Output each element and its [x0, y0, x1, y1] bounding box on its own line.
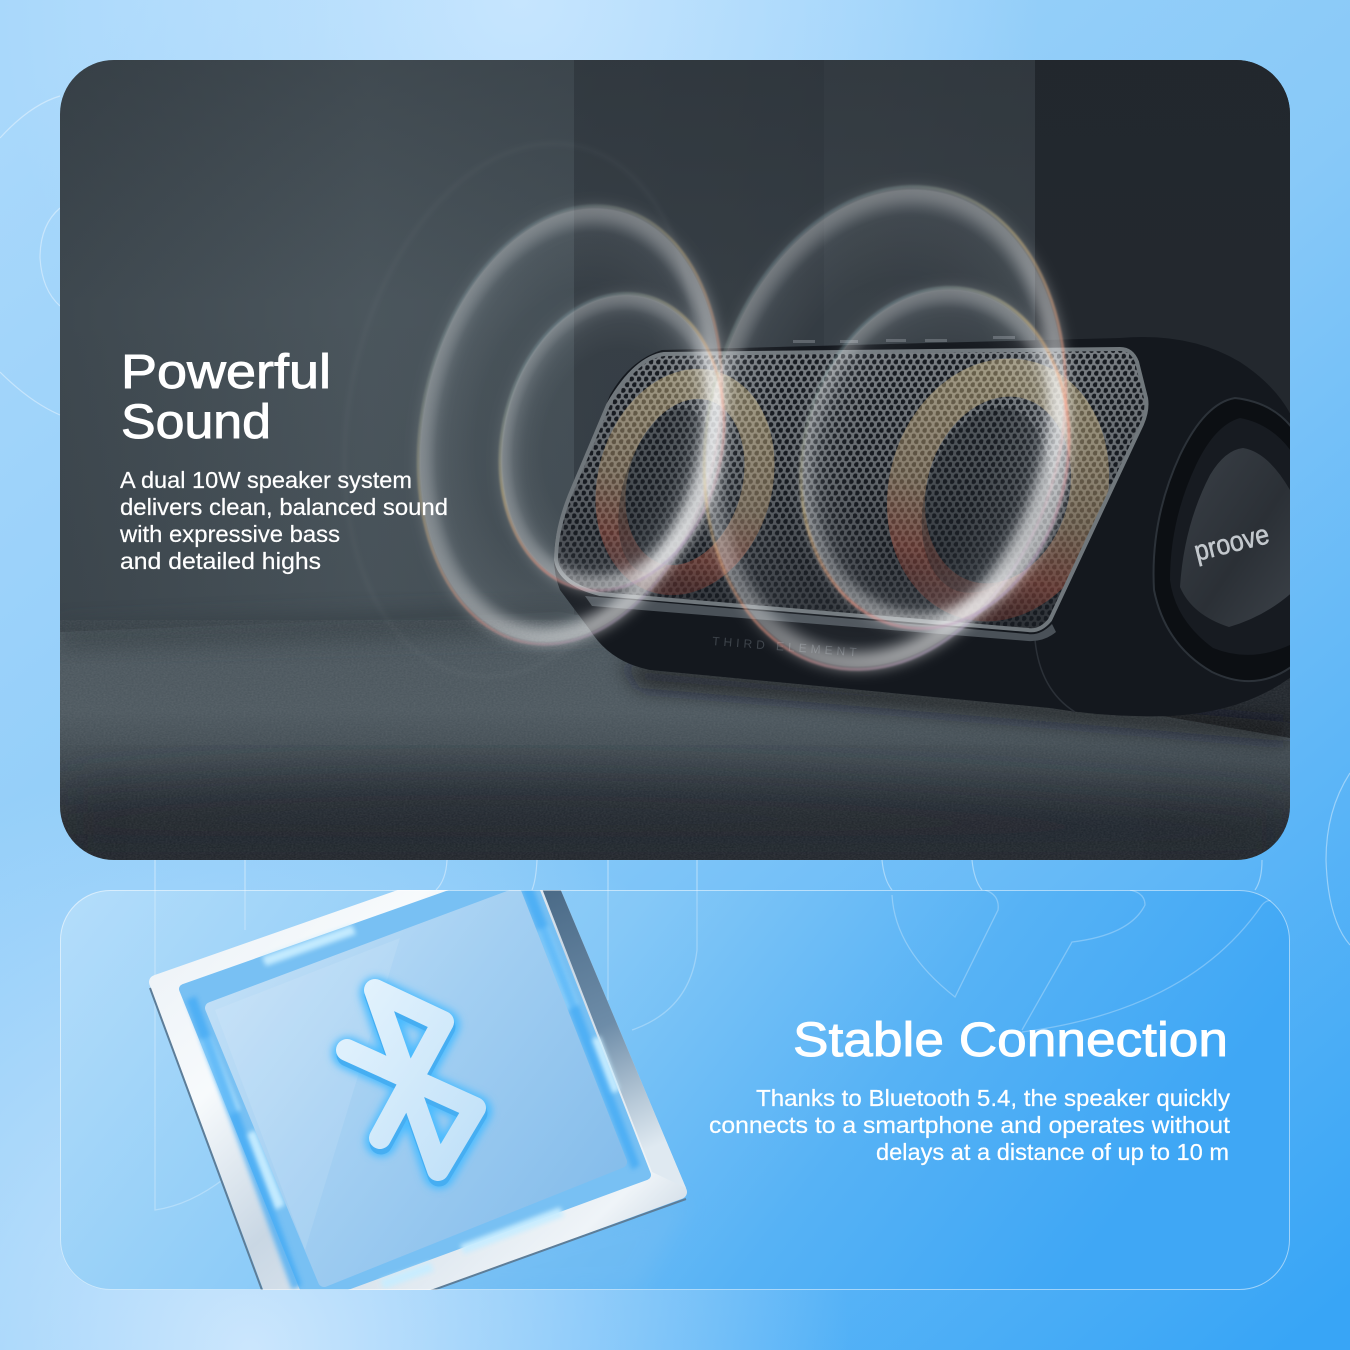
left outer ring — [414, 201, 730, 653]
grille silver frame — [556, 349, 1146, 630]
wall backdrop — [60, 60, 1290, 760]
body text: dual speaker: and detailed highs — [120, 548, 321, 574]
tile frame — [149, 890, 687, 1290]
faint halo rings — [298, 111, 742, 709]
frame dark edges — [150, 988, 686, 1302]
panel outline — [60, 890, 1290, 1290]
speaker body — [554, 337, 1300, 716]
left inner ring — [496, 289, 734, 599]
Bluetooth glyph — [347, 990, 476, 1175]
body text: dual speaker: with expressive bass — [119, 521, 340, 547]
heading: Stable Connection: Stable Connection — [793, 1014, 1228, 1067]
grille — [558, 351, 1144, 628]
decorative logo outlines — [155, 890, 1290, 1210]
right outer ring — [702, 182, 1076, 679]
speaker end cap — [1154, 398, 1300, 681]
right inner ring — [796, 282, 1078, 637]
model engraving: THIRD ELEMENT — [712, 634, 861, 660]
body text: Bluetooth 5.4: delays at a distance of up to 10 m — [876, 1139, 1229, 1165]
body text: Bluetooth 5.4 — [709, 1085, 1231, 1165]
body text: dual speaker: A dual 10W speaker system — [120, 467, 412, 493]
heading: Powerful Sound: Powerful — [121, 346, 331, 399]
brand logo: proove — [1191, 518, 1272, 567]
panel: Bluetooth connection — [60, 890, 1290, 1290]
body text: Bluetooth 5.4: Thanks to Bluetooth 5.4, the speaker quickly — [756, 1085, 1231, 1111]
body text: Bluetooth 5.4: connects to a smartphone and operates without — [709, 1112, 1231, 1138]
sound wave rings — [414, 182, 1078, 679]
heading: Powerful Sound: Sound — [121, 396, 271, 449]
bottom trim strip — [585, 596, 1056, 641]
speaker — [540, 336, 1300, 716]
Bluetooth tile — [149, 890, 687, 1290]
frame dark right strip — [542, 890, 686, 1188]
frosted plate — [211, 894, 621, 1281]
plate sheen — [215, 938, 400, 1250]
top control buttons — [793, 336, 1015, 343]
glowing channel — [184, 868, 646, 1299]
channel deep blue glow — [186, 880, 640, 1290]
body text: dual speaker — [119, 467, 448, 574]
body text: dual speaker: delivers clean, balanced sound — [120, 494, 448, 520]
floor — [60, 612, 1290, 860]
panel: speaker photo — [60, 60, 1300, 860]
speaker cap disc — [1180, 448, 1300, 627]
heading: Powerful Sound — [122, 352, 328, 439]
channel light pieces — [200, 925, 620, 1289]
